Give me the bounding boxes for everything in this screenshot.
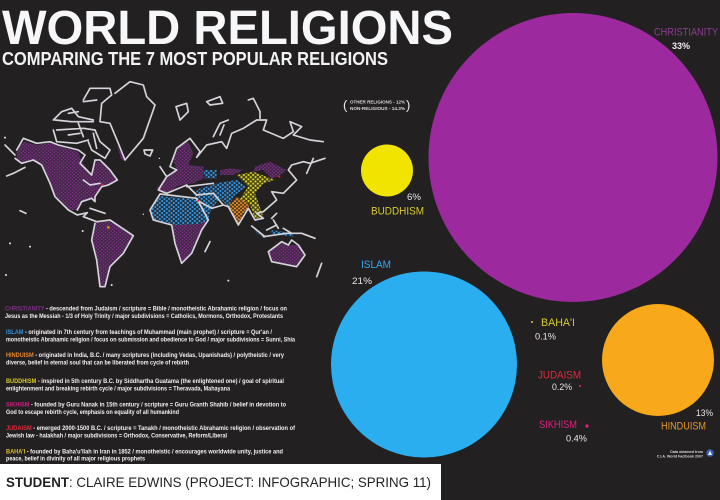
map: Muslim regions bbox=[150, 170, 293, 238]
text: Baha'i bbox=[6, 448, 283, 462]
text: Judaism: JUDAISM - emerged 2000-1500 B.C. / scripture = Tanakh / monotheistic Abrahamic religion / observation of bbox=[6, 425, 296, 432]
circle: Islam bbox=[331, 272, 517, 458]
text: Baha'i: peace, belief in divinity of all major religious prophets bbox=[6, 456, 145, 462]
text: Baha'i: BAHA'I - founded by Baha'u'llah in Iran in 1852 / monotheistic / encourages worldwide unity, justice and bbox=[6, 448, 283, 456]
label: Hinduism bbox=[661, 408, 713, 432]
text: Islam: monotheistic Abrahamic religion / focus on submission and obedience to God / major subdivisions = Sunni, Shia bbox=[6, 336, 295, 344]
text: Islam: ISLAM - originated in 7th century from teachings of Muhammad (main prophet) / scripture = Qur'an / bbox=[6, 329, 272, 336]
label: Hinduism: HINDUISM bbox=[661, 420, 706, 432]
label: Buddhism: 6% bbox=[407, 192, 422, 203]
text: Sikhism: God to escape rebirth cycle, emphasis on equality of all humankind bbox=[6, 409, 179, 416]
text: Hinduism: HINDUISM - originated in India, B.C. / many scriptures (including Vedas, Upanishads) / polytheistic / very bbox=[6, 352, 285, 359]
text: Sikhism: SIKHISM - founded by Guru Nanak in 15th century / scripture = Guru Granth Shahib / belief in devotion to bbox=[6, 402, 286, 408]
label: Islam: 21% bbox=[352, 276, 373, 287]
label: Sikhism bbox=[539, 419, 589, 444]
text: Judaism: Jewish law - halakhah / major subdivisions = Orthodox, Conservative, Reform/Liberal bbox=[6, 432, 227, 440]
data source note bbox=[657, 449, 714, 458]
label: Christianity bbox=[654, 26, 719, 52]
text: Sikhism bbox=[6, 402, 286, 416]
map: small dots bbox=[4, 137, 229, 286]
text: Islam bbox=[6, 329, 295, 344]
text: Hinduism bbox=[6, 352, 285, 366]
subtitle: COMPARING THE 7 MOST POPULAR RELIGIONS bbox=[2, 49, 388, 69]
label: Judaism bbox=[538, 370, 581, 393]
text: Christianity: Jesus as the Messiah - 1/3 of Holy Trinity / major subdivisions = Catholics, Mormons, Orthodox, Protestants bbox=[5, 313, 283, 320]
text: Hinduism: diverse, belief in eternal soul that can be liberated from cycle of rebirth bbox=[6, 360, 189, 366]
circle: Buddhism bbox=[361, 144, 413, 196]
data source note: Data obtained from bbox=[670, 450, 703, 454]
religion descriptions bbox=[5, 306, 296, 462]
caption bar bbox=[0, 464, 441, 500]
text: Buddhism bbox=[6, 378, 284, 392]
label: Christianity: 33% bbox=[672, 41, 691, 52]
label: Hinduism: 13% bbox=[696, 408, 713, 419]
label: Baha'i bbox=[531, 317, 575, 342]
other religions note: ( bbox=[343, 98, 348, 112]
other religions note: OTHER RELIGIONS - 12% bbox=[350, 100, 405, 104]
map: Buddhist regions bbox=[237, 172, 275, 219]
map: coastlines bbox=[5, 82, 325, 287]
other religions note: NON-RELIGIOUS - 14.3% bbox=[350, 106, 405, 111]
other religions note bbox=[343, 98, 410, 112]
label: Judaism: 0.2% bbox=[552, 382, 573, 393]
label: Judaism: JUDAISM bbox=[538, 370, 581, 382]
label: Sikhism: 0.4% bbox=[566, 434, 588, 444]
circle: Hinduism bbox=[602, 304, 714, 416]
title: WORLD RELIGIONS bbox=[2, 2, 453, 55]
text: Buddhism: BUDDHISM - inspired in 5th century B.C. by Siddhartha Guatama (the enlightened one) / goal of spiritual bbox=[6, 378, 284, 385]
world map bbox=[4, 82, 325, 287]
text: Buddhism: enlightenment and breaking rebirth cycle / major subdivisions = Theravada, Mahayana bbox=[6, 386, 230, 392]
map: Christian regions bbox=[17, 142, 305, 287]
label: Buddhism bbox=[371, 192, 424, 218]
text: Christianity bbox=[5, 306, 287, 320]
label: Baha'i: 0.1% bbox=[535, 332, 557, 342]
label: Baha'i: BAHA'I bbox=[541, 317, 575, 329]
caption bar: STUDENT: CLAIRE EDWINS (PROJECT: INFOGRAPHIC; SPRING 11) bbox=[6, 475, 431, 490]
other religions note: ) bbox=[406, 98, 410, 112]
label: Islam: ISLAM bbox=[361, 259, 391, 271]
circle: Christianity bbox=[428, 13, 718, 302]
data source note: C.I.A. World Factbook 2007 bbox=[657, 454, 703, 458]
map: Hindu regions bbox=[228, 197, 250, 225]
text: Judaism bbox=[6, 425, 296, 440]
label: Buddhism: BUDDHISM bbox=[371, 206, 424, 218]
label: Sikhism: SIKHISM bbox=[539, 419, 577, 431]
label: Islam bbox=[352, 259, 391, 287]
text: Christianity: CHRISTIANITY - descended from Judaism / scripture = Bible / monotheistic Abrahamic religion / focus on bbox=[5, 306, 287, 312]
